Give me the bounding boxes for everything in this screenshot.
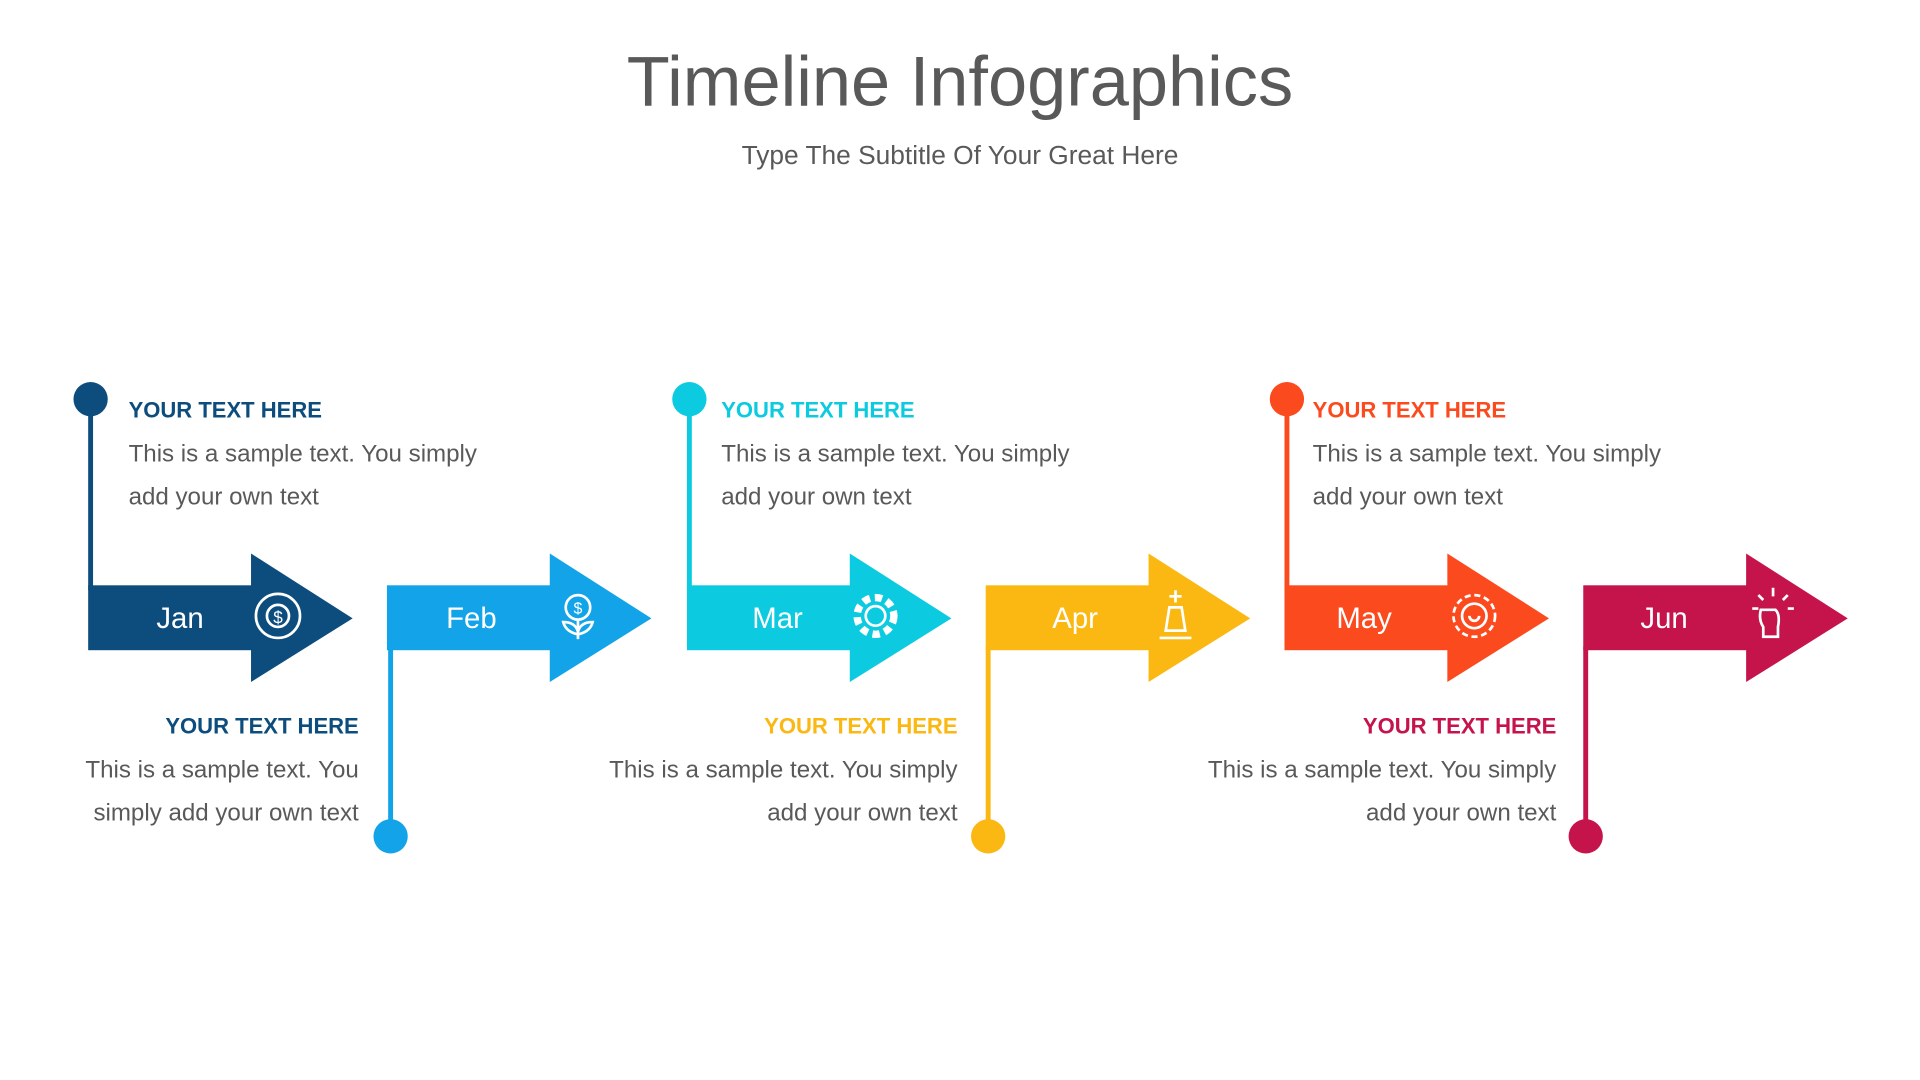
icon: money cycle xyxy=(256,594,300,638)
pin: Mar xyxy=(672,382,707,590)
text: Feb: YOUR TEXT HERE xyxy=(165,713,359,738)
arrow: Jan xyxy=(88,553,353,682)
icon: gear xyxy=(857,598,894,634)
icon: gear badge xyxy=(1453,595,1495,637)
text: Apr: This is a sample text. You simply xyxy=(609,757,958,784)
arrow: May: May xyxy=(1336,602,1392,635)
text: May xyxy=(1313,398,1661,510)
text: Apr: YOUR TEXT HERE xyxy=(764,713,958,738)
step: Jan xyxy=(73,382,477,682)
arrow: Mar xyxy=(687,553,951,682)
pin: Feb xyxy=(373,647,408,853)
arrow: Jun: Jun xyxy=(1640,602,1688,635)
step: Jun xyxy=(1208,553,1848,853)
arrow: Feb xyxy=(387,553,651,682)
text: Apr xyxy=(609,713,958,826)
subtitle: Type The Subtitle Of Your Great Here xyxy=(742,140,1178,170)
step: Mar xyxy=(672,382,1070,682)
title: Timeline Infographics xyxy=(627,41,1293,120)
arrow: May xyxy=(1284,553,1549,682)
text: Apr: add your own text xyxy=(767,799,958,826)
text: Jan: YOUR TEXT HERE xyxy=(129,398,322,423)
pin: Jan xyxy=(73,382,108,590)
text: Mar: add your own text xyxy=(721,483,912,510)
text: Jun: YOUR TEXT HERE xyxy=(1363,713,1556,738)
text: Feb: simply add your own text xyxy=(93,799,359,826)
text: May: YOUR TEXT HERE xyxy=(1313,398,1506,423)
text: Mar: YOUR TEXT HERE xyxy=(721,398,915,423)
pin: Jun xyxy=(1569,647,1603,853)
text: Jan: add your own text xyxy=(129,483,319,510)
arrow: Apr xyxy=(986,553,1250,682)
text: May: This is a sample text. You simply xyxy=(1313,441,1661,468)
text: Jan: This is a sample text. You simply xyxy=(129,441,477,468)
arrow: Jan: Jan xyxy=(156,602,204,635)
text: Feb xyxy=(85,713,359,826)
pin: May xyxy=(1270,382,1304,590)
text: May: add your own text xyxy=(1313,483,1503,510)
pin: Apr xyxy=(971,647,1005,853)
arrow: Apr: Apr xyxy=(1052,602,1098,635)
text: Feb: This is a sample text. You xyxy=(85,757,359,784)
arrow: Jun xyxy=(1583,553,1848,682)
icon: chess king xyxy=(1160,590,1191,638)
icon: money plant: $ xyxy=(574,600,583,617)
arrow: Mar: Mar xyxy=(752,602,803,635)
icon: hand xyxy=(1752,588,1794,637)
text: Mar xyxy=(721,398,1070,510)
text: Jun xyxy=(1208,713,1557,826)
text: Mar: This is a sample text. You simply xyxy=(721,441,1070,468)
step: Apr xyxy=(609,553,1250,853)
text: Jun: add your own text xyxy=(1366,799,1557,826)
icon: money cycle: $ xyxy=(273,607,283,627)
icon: money plant xyxy=(563,595,593,639)
arrow: Feb: Feb xyxy=(446,602,497,635)
step: Feb xyxy=(85,553,651,853)
text: Jan xyxy=(129,398,477,510)
text: Jun: This is a sample text. You simply xyxy=(1208,757,1556,784)
step: May xyxy=(1270,382,1661,682)
